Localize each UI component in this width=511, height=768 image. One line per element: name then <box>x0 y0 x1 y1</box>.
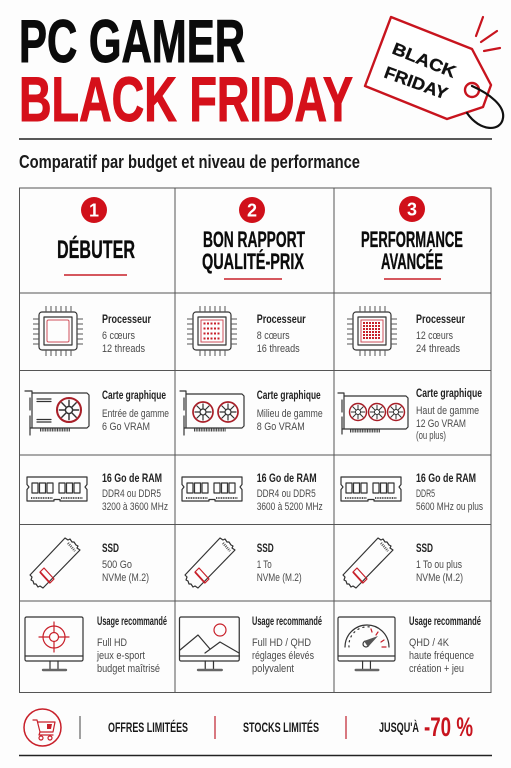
icon: ram 1 <box>27 477 87 501</box>
text: ssd 1: SSD <box>102 543 119 555</box>
footer: offres limitées: OFFRES LIMITÉES <box>108 719 188 735</box>
text: graphics card 1: Carte graphique <box>102 390 166 402</box>
icon: ram 3 <box>341 477 401 501</box>
title <box>19 8 353 135</box>
text: ssd 3: 1 To ou plus <box>416 559 462 571</box>
text: usage 3: QHD / 4K <box>409 637 450 649</box>
text: ssd 2: SSD <box>257 543 274 555</box>
text: processor 3: Processeur <box>416 314 465 326</box>
icon: graphics card 1 fan <box>25 391 89 435</box>
icon: black friday price tag: BLACK <box>390 39 459 82</box>
icon: ram 2 <box>182 477 242 501</box>
text: usage 3: création + jeu <box>409 663 464 675</box>
icon: ssd 3 <box>343 538 393 588</box>
icon: graphics card 3 fans <box>338 393 408 434</box>
text: processor 2: Processeur <box>257 314 306 326</box>
text: usage 1: Usage recommandé <box>97 616 167 628</box>
column 1 header <box>57 197 135 275</box>
icon: graphics card 2 fans <box>180 391 244 435</box>
subtitle: Comparatif par budget et niveau de performance <box>19 152 360 172</box>
title: PC GAMER <box>19 8 245 75</box>
icon: monitor with target <box>25 617 83 670</box>
text: graphics card 3: (ou plus) <box>416 430 446 442</box>
icon: black friday price tag <box>365 17 503 128</box>
text: graphics card 2: Carte graphique <box>257 390 321 402</box>
text: processor 1: 6 cœurs <box>102 330 135 342</box>
footer: discount: -70 % <box>424 712 473 742</box>
text: graphics card 3: Carte graphique <box>416 388 482 400</box>
column 3 header <box>361 196 463 279</box>
text: usage 1: budget maîtrisé <box>97 663 160 675</box>
text: usage 3 <box>409 616 481 675</box>
text: ram 3: 5600 MHz ou plus <box>416 501 483 513</box>
text: ssd 3: SSD <box>416 543 433 555</box>
text: ssd 3 <box>416 543 463 584</box>
text: processor 2: 8 cœurs <box>257 330 290 342</box>
footer: discount <box>379 712 473 742</box>
text: usage 1: jeux e-sport <box>96 650 145 662</box>
text: usage 3: haute fréquence <box>409 650 474 662</box>
icon: shopping cart <box>24 709 61 746</box>
text: ssd 2 <box>257 543 302 584</box>
icon: cpu 12 cores <box>347 306 397 356</box>
text: usage 1 <box>96 616 167 675</box>
text: ssd 1: 500 Go <box>102 559 132 571</box>
text: usage 2: polyvalent <box>252 663 294 675</box>
text: usage 2: Usage recommandé <box>252 616 322 628</box>
column 1 header: DÉBUTER <box>57 235 135 264</box>
text: ram 2 <box>257 473 323 513</box>
text: graphics card 2: 8 Go VRAM <box>257 421 305 433</box>
icon: monitor with gauge <box>338 617 395 670</box>
text: usage 1: Full HD <box>97 637 127 649</box>
icon: cpu 8 cores <box>187 306 237 356</box>
text: graphics card 3: 12 Go VRAM <box>416 418 466 430</box>
footer: stocks limités: STOCKS LIMITÉS <box>243 719 319 735</box>
column 2 header: BON RAPPORT <box>203 227 305 252</box>
text: processor 1: 12 threads <box>102 343 145 355</box>
text: processor 1 <box>102 314 151 355</box>
text: ram 1: 3200 à 3600 MHz <box>102 501 168 513</box>
text: ram 1: 16 Go de RAM <box>102 473 162 485</box>
column 1 header: 1 <box>89 200 99 220</box>
title: BLACK FRIDAY <box>19 65 353 135</box>
text: ram 1: DDR4 ou DDR5 <box>102 488 161 500</box>
icon: monitor with landscape <box>180 617 239 670</box>
text: ssd 2: NVMe (M.2) <box>257 572 302 584</box>
text: ram 3: DDR5 <box>416 488 435 500</box>
text: usage 2: Full HD / QHD <box>252 637 311 649</box>
icon: cpu 6 cores <box>33 306 83 356</box>
column 2 header: QUALITÉ-PRIX <box>202 249 304 274</box>
column 3 header: AVANCÉE <box>381 249 443 274</box>
text: processor 3 <box>416 314 465 355</box>
text: graphics card 1: Entrée de gamme <box>102 408 169 420</box>
text: usage 2 <box>252 616 322 675</box>
text: graphics card 3: Haut de gamme <box>416 405 479 417</box>
text: ram 1 <box>102 473 168 513</box>
text: ssd 1: NVMe (M.2) <box>102 572 149 584</box>
icon: black friday price tag: FRIDAY <box>382 63 451 104</box>
text: graphics card 3 <box>416 388 482 442</box>
text: ssd 1 <box>102 543 149 584</box>
text: processor 2: 16 threads <box>257 343 300 355</box>
column 2 header: 2 <box>247 200 257 220</box>
text: ram 3: 16 Go de RAM <box>416 473 476 485</box>
text: ssd 2: 1 To <box>257 559 272 571</box>
text: processor 3: 12 cœurs <box>416 330 453 342</box>
text: ram 2: DDR4 ou DDR5 <box>257 488 316 500</box>
footer: discount: JUSQU'À <box>379 719 419 735</box>
column 2 header <box>202 197 305 279</box>
text: graphics card 2 <box>257 390 323 433</box>
text: usage 2: réglages élevés <box>252 650 314 662</box>
text: graphics card 1: 6 Go VRAM <box>102 421 150 433</box>
column 3 header: 3 <box>407 200 417 220</box>
text: processor 2 <box>257 314 306 355</box>
icon: ssd 1 <box>30 538 80 588</box>
text: ram 2: 3600 à 5200 MHz <box>257 501 323 513</box>
text: graphics card 1 <box>102 390 169 433</box>
text: ram 2: 16 Go de RAM <box>257 473 317 485</box>
icon: ssd 2 <box>185 538 235 588</box>
text: ram 3 <box>416 473 483 513</box>
text: graphics card 2: Milieu de gamme <box>257 408 323 420</box>
comparison table grid <box>19 188 491 692</box>
text: processor 3: 24 threads <box>416 343 460 355</box>
text: ssd 3: NVMe (M.2) <box>416 572 463 584</box>
text: processor 1: Processeur <box>102 314 151 326</box>
